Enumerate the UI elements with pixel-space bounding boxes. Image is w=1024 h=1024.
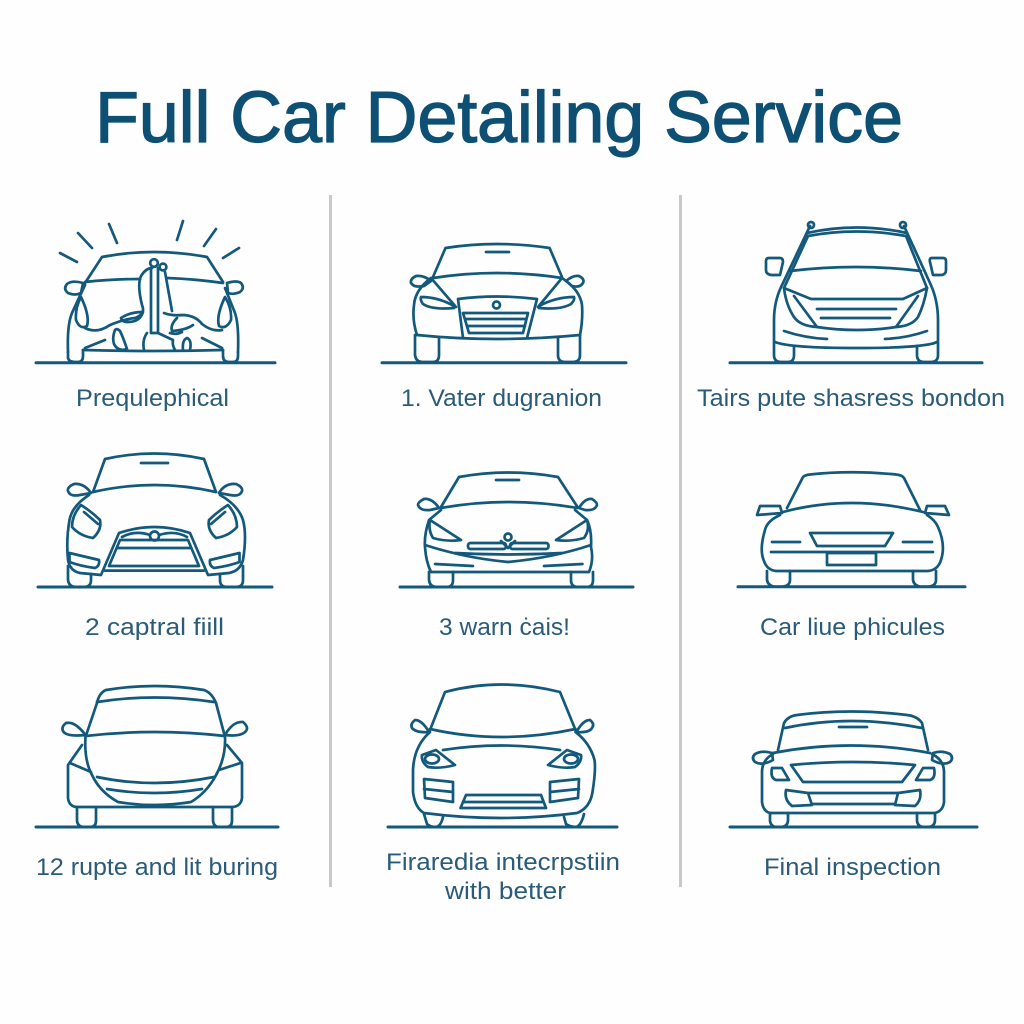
icon: car with sparkle rays and wash tools	[60, 221, 243, 362]
panel: step 6 car liue phicules	[738, 472, 965, 641]
ground line	[400, 586, 633, 588]
title: Full Car Detailing Service	[95, 78, 903, 158]
icon: SUV front view with roof rails	[766, 222, 946, 362]
panel: step 4 captral fiill	[38, 454, 272, 641]
label: 3 warn ċais!	[439, 614, 570, 641]
icon: sports coupe front view	[67, 454, 245, 587]
label: Firaredia intecrpstiin	[386, 849, 620, 876]
panel: step 1 prequlephical	[36, 221, 275, 412]
column divider right	[679, 195, 682, 887]
label second line: with better	[444, 878, 566, 905]
icon: sedan front view with grille	[411, 244, 584, 362]
ground line	[36, 361, 275, 364]
label: Car liue phicules	[760, 614, 945, 641]
label: 1. Vater dugranion	[401, 385, 602, 412]
ground line	[36, 826, 278, 828]
panel: step 5 warn cais	[400, 472, 633, 641]
ground line	[382, 361, 626, 364]
label: 2 captral fiill	[85, 614, 224, 641]
panel: step 7 rupte and lit buring	[36, 686, 278, 881]
panel: step 8 firaredia intecrpstiin	[386, 684, 620, 905]
label: Final inspection	[764, 854, 941, 881]
icon: low coupe front view	[753, 712, 952, 827]
ground line	[38, 586, 272, 588]
panel: step 9 final inspection	[730, 712, 977, 881]
ground line	[738, 585, 965, 588]
label: Tairs pute shasress bondon	[697, 385, 1005, 412]
ground line	[730, 361, 982, 364]
panel: step 2 water dugranion	[382, 244, 626, 412]
label: 12 rupte and lit buring	[36, 854, 278, 881]
panel: step 3 tairs pute	[697, 222, 1005, 412]
icon: classic car front view with plate	[757, 472, 949, 587]
label: Prequlephical	[76, 385, 229, 412]
ground line	[730, 826, 977, 828]
icon: rounded hatchback front view	[62, 686, 247, 827]
icon: sport sedan front view with fog lamps	[411, 684, 595, 827]
column divider left	[329, 195, 332, 887]
ground line	[388, 826, 617, 828]
icon: saloon front view with emblem	[418, 472, 597, 587]
